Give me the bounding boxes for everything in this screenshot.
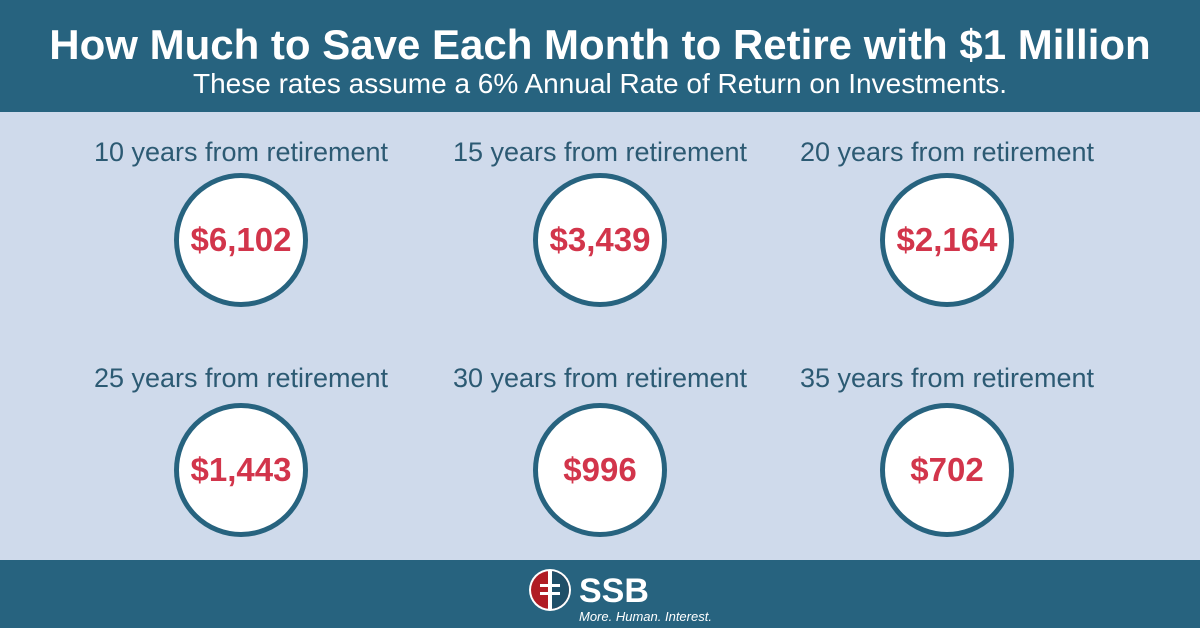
header: [0, 0, 1200, 112]
cell: 30 years: [453, 363, 747, 537]
cell: 30 years: $996: [563, 451, 637, 488]
footer: [0, 560, 1200, 628]
cell: 20 years: 20 years from retirement: [800, 137, 1094, 167]
cell: 20 years: [800, 137, 1094, 307]
cell: 10 years: [94, 137, 388, 307]
cell: 30 years: 30 years from retirement: [453, 363, 747, 393]
brand text: SSB: [579, 572, 649, 610]
cell: 25 years: $1,443: [191, 451, 291, 488]
cell: 10 years: $6,102: [191, 221, 291, 258]
cell: 35 years: [800, 363, 1094, 537]
cell: 35 years: 35 years from retirement: [800, 363, 1094, 393]
cell: 15 years: [453, 137, 747, 307]
cell: 25 years: 25 years from retirement: [94, 363, 388, 393]
brand text: More. Human. Interest.: [579, 609, 712, 624]
cell: 25 years: [94, 363, 388, 537]
cell: 35 years: $702: [910, 451, 984, 488]
logo: [529, 569, 712, 624]
cell: 15 years: $3,439: [550, 221, 650, 258]
title: How Much to Save Each Month to Retire with $1 Million: [49, 21, 1151, 68]
cell: 20 years: $2,164: [897, 221, 997, 258]
subtitle: These rates assume a 6% Annual Rate of Return on Investments.: [193, 68, 1007, 99]
cell: 10 years: 10 years from retirement: [94, 137, 388, 167]
brand text: [579, 572, 712, 624]
icon: SSB cross: [529, 569, 571, 611]
cell: 15 years: 15 years from retirement: [453, 137, 747, 167]
